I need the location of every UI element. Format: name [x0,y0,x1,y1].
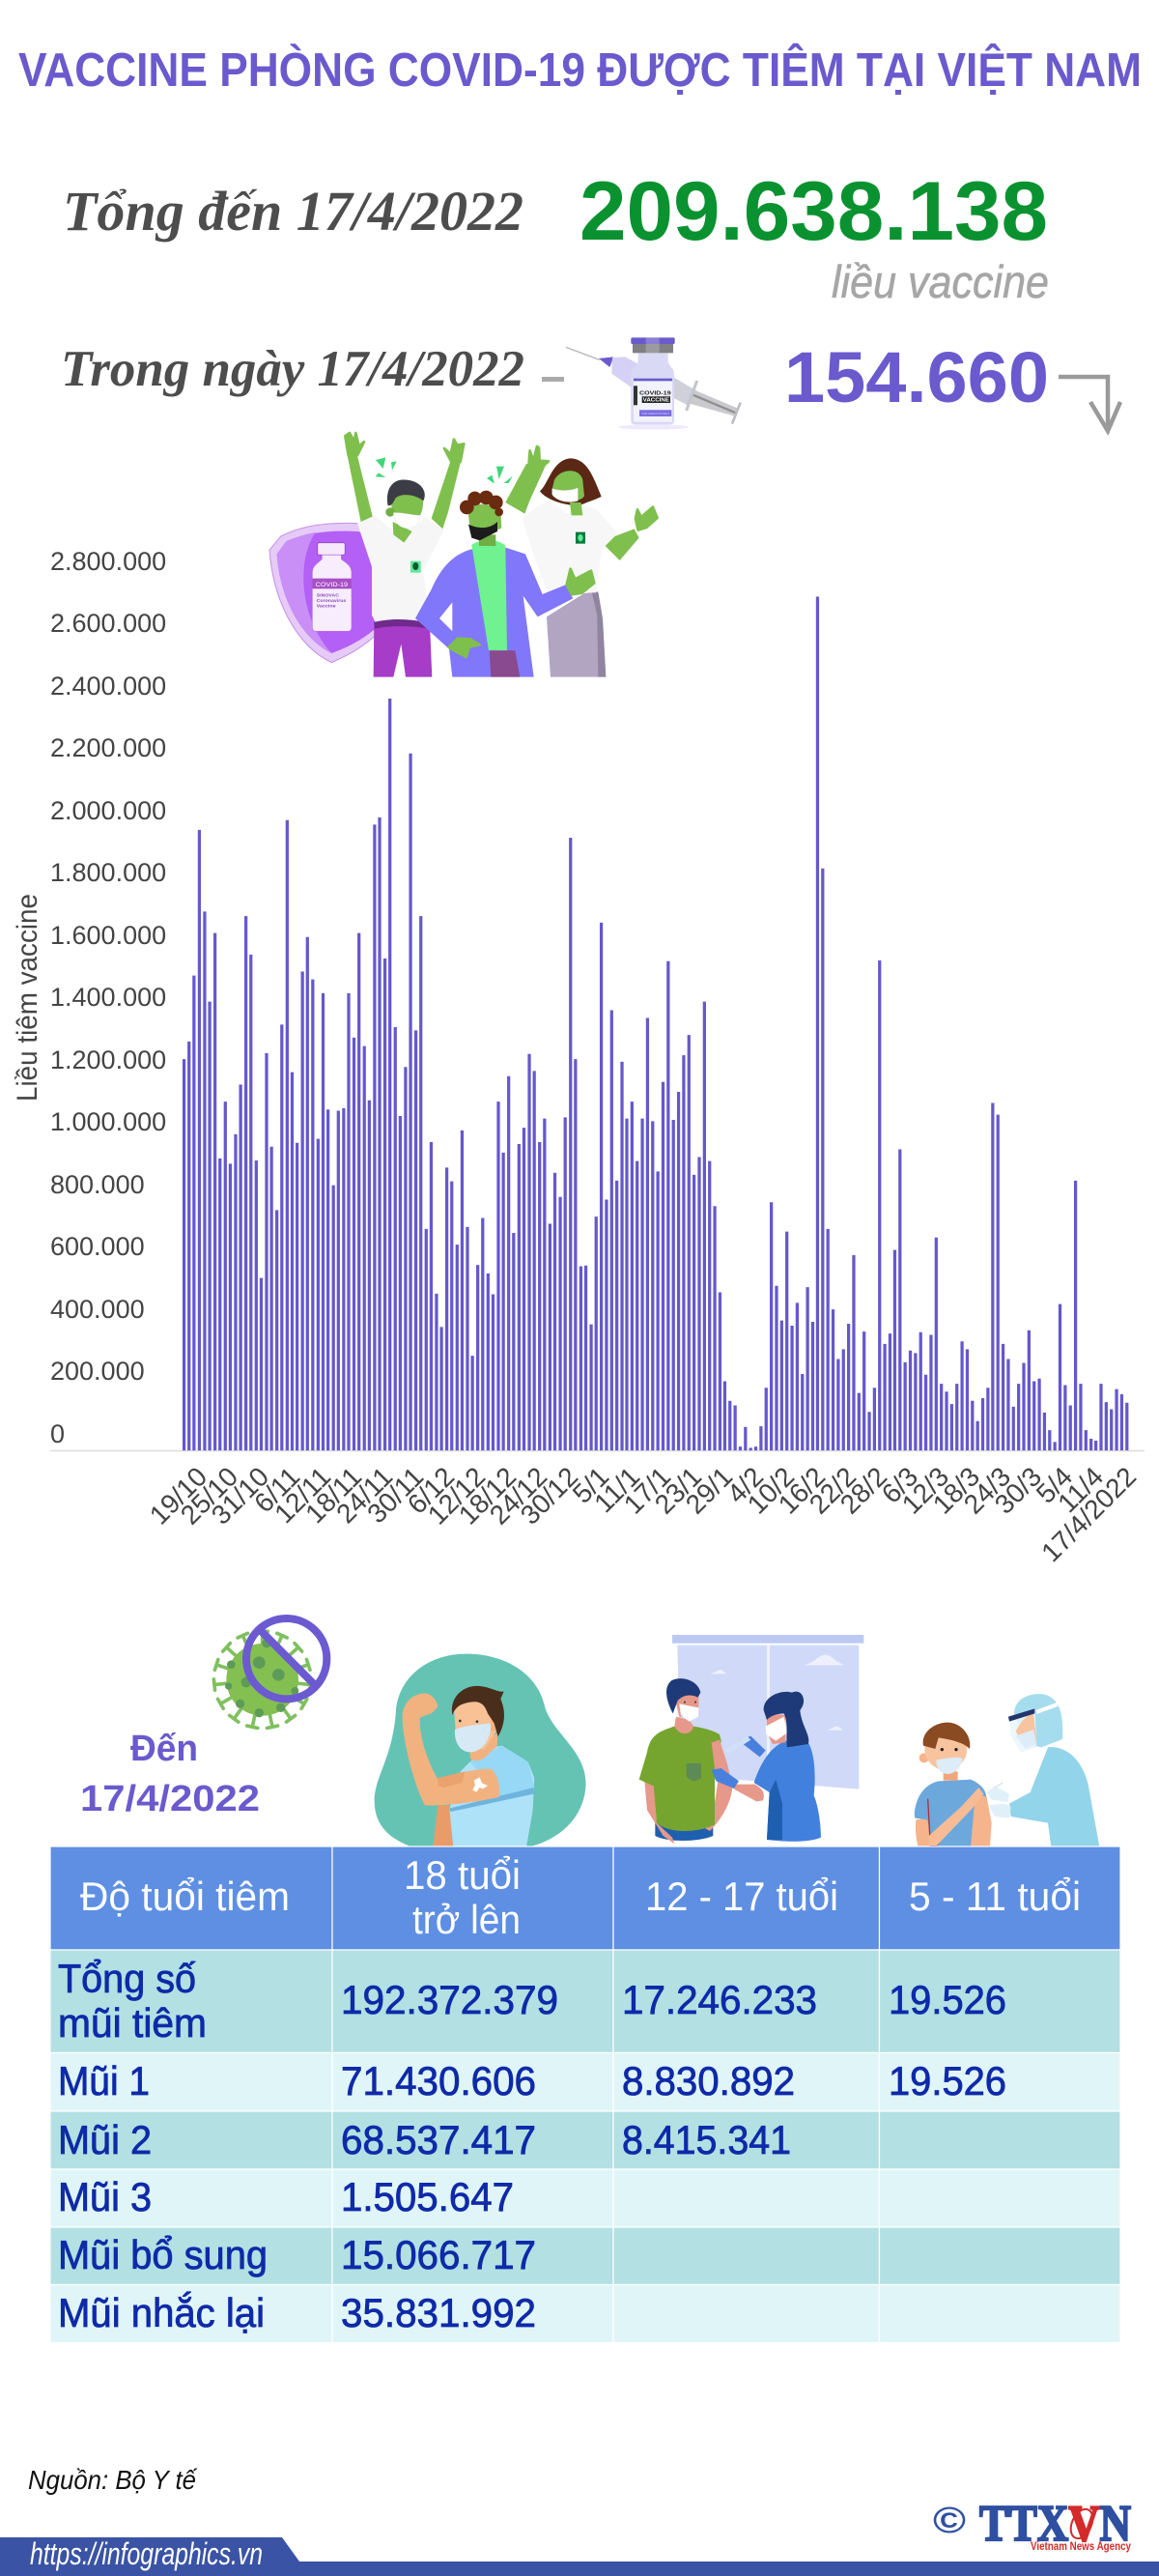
y axis labels: 1.800.000 [50,858,166,887]
x axis date labels: 28/2 [834,1461,892,1520]
row: dose 3 [58,2174,514,2219]
x axis date labels: 18/3 [927,1461,985,1520]
x axis date labels: 29/1 [680,1461,738,1520]
row: dose 3: Mũi 3 [58,2174,152,2219]
x axis date labels: 12/11 [269,1461,336,1529]
cumulative total number: 209.638.138 [580,165,1048,258]
illustration: three cheering people with shield [269,433,658,677]
x axis date labels: 6/11 [248,1461,305,1518]
table backgrounds [50,1846,1120,2342]
x axis date labels: 6/3 [876,1461,923,1509]
shield with vial [269,523,380,663]
date heading: Đến [130,1729,198,1769]
y axis labels: 1.400.000 [50,983,166,1012]
man in green shirt [639,1678,732,1844]
table: doses by age group [50,1846,1120,2342]
x axis date labels: 30/12 [515,1461,583,1531]
y axis labels [50,547,166,1448]
row: total doses [58,1956,1006,2046]
x axis date labels: 30/3 [989,1461,1047,1520]
x axis date labels: 17/4/2022 [1035,1461,1142,1567]
x axis date labels: 31/10 [206,1461,274,1531]
bar chart: daily doses [12,547,1145,1567]
x axis date labels: 24/12 [484,1461,552,1531]
arrow: down [1059,377,1120,431]
row: total doses: 17.246.233 [622,1977,817,2022]
row: total doses: mũi tiêm [58,2000,207,2046]
shield with vial: Coronavirus [317,598,347,603]
header row: trở lên [412,1897,521,1942]
row: dose 1: 8.830.892 [622,2058,795,2104]
x axis date labels: 24/11 [330,1461,398,1529]
y axis labels: 2.800.000 [50,547,166,576]
shield with vial: Vaccine [317,603,336,608]
nurse [712,1692,821,1842]
y axis labels: 200.000 [50,1357,145,1386]
y axis labels: 0 [50,1419,65,1448]
row: dose 1 [58,2058,1006,2104]
row: dose 1: 71.430.606 [341,2058,536,2104]
y axis labels: 1.000.000 [50,1107,166,1136]
x axis date labels: 18/11 [299,1461,367,1529]
unit label: liều vaccine [832,256,1049,307]
icon: vial and syringe: VACCINE [643,398,669,404]
header row: 5 - 11 tuổi [909,1874,1081,1919]
child [915,1723,992,1846]
y axis labels: 2.200.000 [50,733,166,762]
row: total doses: 19.526 [889,1977,1006,2022]
y axis labels: 400.000 [50,1295,145,1324]
row: dose 1: Mũi 1 [58,2058,150,2104]
y axis labels: 2.000.000 [50,796,166,825]
row: dose 3: 1.505.647 [341,2174,514,2219]
label: cumulative total date: Tổng đến 17/4/2022 [63,180,523,243]
row: total doses: Tổng số [58,1956,196,2001]
icon: virus with prohibition sign [213,1618,326,1728]
x axis date labels: 23/1 [649,1461,707,1520]
x axis date labels: 5/4 [1031,1461,1078,1509]
row: booster dose: 35.831.992 [341,2290,536,2335]
x axis date labels: 4/2 [721,1461,769,1509]
footer bar with URL [0,2536,1159,2576]
x axis date labels: 16/2 [773,1461,831,1520]
bars [184,596,1127,1450]
icon: vial and syringe: COVID-19 [639,391,671,397]
x axis date labels: 19/10 [144,1461,212,1531]
label: daily date: Trong ngày 17/4/2022 [61,341,524,397]
y axis labels: 1.600.000 [50,921,166,950]
man with beard and coat [415,491,594,677]
illustration: child being vaccinated, 5-11 [915,1694,1099,1846]
logo: TTXVN: © [933,2501,966,2541]
date heading: 17/4/2022 [80,1779,260,1819]
x axis date labels: 17/1 [618,1461,676,1520]
x axis date labels: 12/12 [422,1461,491,1531]
x axis date labels: 24/3 [958,1461,1016,1520]
y axis labels: 800.000 [50,1170,145,1199]
row: booster dose [58,2290,536,2335]
row: dose 2: Mũi 2 [58,2117,152,2162]
daily number: 154.660 [784,337,1049,417]
x axis date labels: 5/1 [567,1461,614,1509]
row: additional dose [58,2232,536,2277]
y axis labels: 1.200.000 [50,1045,166,1074]
row: booster dose: Mũi nhắc lại [58,2290,265,2335]
row: dose 2: 8.415.341 [622,2117,791,2162]
x axis date labels: 11/4 [1052,1461,1109,1518]
date heading [80,1729,260,1819]
x axis date labels: 12/3 [896,1461,954,1520]
header row [80,1852,1081,1942]
x axis date labels: 11/1 [588,1461,645,1518]
row: additional dose: 15.066.717 [341,2232,536,2277]
shield with vial: COVID-19 [316,582,349,588]
source: Nguồn: Bộ Y tế [28,2465,198,2495]
health worker in protective suit [987,1694,1099,1846]
row: total doses: 192.372.379 [341,1977,558,2022]
footer bar with URL: https://infographics.vn [30,2536,263,2571]
x axis date labels: 25/10 [175,1461,243,1531]
row: dose 1: 19.526 [889,2058,1006,2104]
row: additional dose: Mũi bổ sung [58,2232,268,2277]
header row: 12 - 17 tuổi [645,1874,838,1919]
y axis labels: 2.400.000 [50,672,166,701]
man with raised arms [345,433,464,677]
illustration: man flexing arm, 18+ [375,1654,586,1847]
shield with vial: SINOVAC [317,593,340,598]
dash [542,377,564,382]
logo: TTXVN: Vietnam News Agency [1031,2539,1131,2553]
header row: 18 tuổi [404,1852,521,1898]
woman [487,446,658,677]
x axis date labels: 10/2 [742,1461,800,1520]
icon: vial and syringe: FOR INJECTION ONLY [642,412,669,415]
y axis labels: 600.000 [50,1232,145,1261]
x axis date labels [144,1461,1142,1567]
x axis date labels: 18/12 [453,1461,522,1531]
row: dose 2 [58,2117,791,2162]
row: dose 2: 68.537.417 [341,2117,536,2162]
x axis date labels: 30/11 [361,1461,429,1529]
logo: TTXVN: TTXVN [979,2496,1131,2552]
x axis date labels: 22/2 [804,1461,862,1520]
y axis title: Liều tiêm vaccine [12,894,43,1102]
icon: vial and syringe [566,337,741,430]
illustration: nurse vaccinating man, 12-17 [639,1635,863,1844]
y axis labels: 2.600.000 [50,609,166,638]
axis line [50,1449,1145,1451]
header row: Độ tuổi tiêm [80,1874,290,1919]
x axis date labels: 6/12 [402,1461,460,1520]
